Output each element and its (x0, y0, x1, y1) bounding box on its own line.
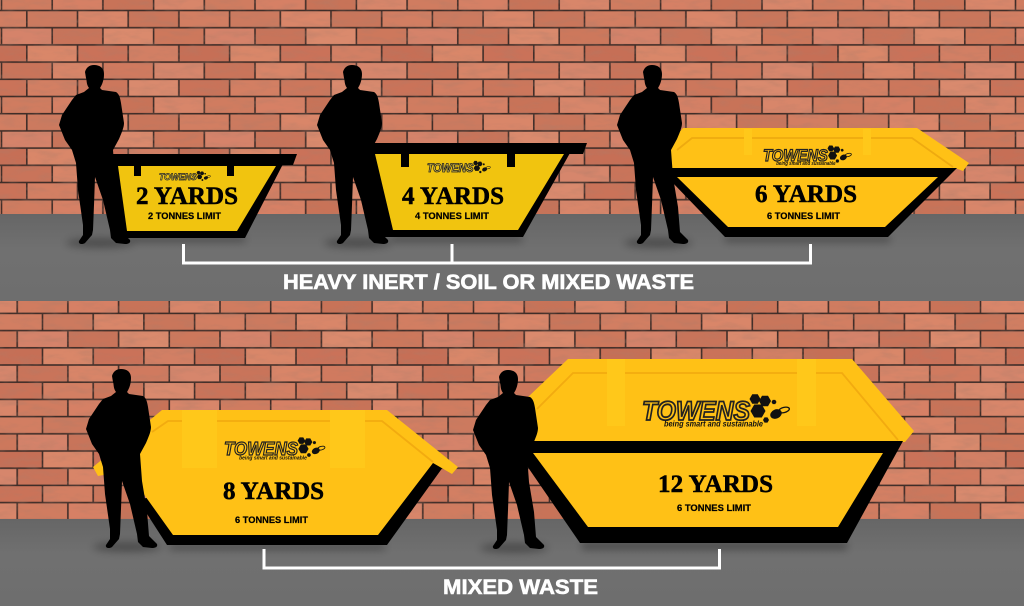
lid straps (744, 129, 871, 155)
skip body panel (533, 453, 883, 527)
logo: being smart and sustainable (239, 455, 308, 461)
logo: TOWENS (159, 172, 197, 183)
logo (763, 146, 852, 167)
skip lid (666, 128, 969, 171)
size label: 4 YARDS (402, 183, 504, 210)
brick wall: upper (0, 0, 1024, 214)
lid crease line (152, 421, 433, 462)
weight limit: 6 TONNES LIMIT (235, 515, 309, 525)
skip: 8 yards (93, 410, 458, 545)
weight limit: 4 TONNES LIMIT (415, 211, 490, 221)
skip body frame (108, 154, 283, 238)
skip body frame (138, 460, 443, 545)
weight limit: 6 TONNES LIMIT (767, 211, 841, 221)
brick wall: lower (0, 301, 1024, 519)
size label: 2 YARDS (136, 183, 238, 210)
skip rim (366, 143, 587, 154)
size label: 8 YARDS (223, 478, 324, 505)
lid straps (182, 410, 365, 468)
lid straps (607, 359, 816, 426)
size label: 12 YARDS (658, 471, 773, 498)
bracket: heavy inert group (184, 244, 810, 263)
silhouette: person beside 8 yard skip (86, 369, 157, 548)
skip body frame (366, 143, 570, 237)
skip body panel (375, 154, 564, 230)
skip body frame (520, 441, 903, 543)
brick texture: upper (0, 0, 1024, 214)
logo: TOWENS (427, 162, 474, 175)
brick texture: lower (0, 301, 1024, 519)
skip lid (520, 359, 914, 442)
skip yellow shell (93, 410, 458, 535)
skip rim (108, 154, 297, 165)
logo: TOWENS (642, 396, 750, 426)
lifting tabs (401, 153, 515, 167)
ground shadows (66, 236, 890, 553)
size label: 6 YARDS (755, 181, 857, 208)
background: upper ground (0, 214, 1024, 302)
skip: 2 yards (108, 154, 297, 238)
silhouette: person beside 4 yard skip (317, 65, 388, 244)
logo (224, 437, 325, 461)
logo: being smart and sustainable (664, 418, 763, 428)
logo: TOWENS (224, 438, 299, 459)
skip: 12 yards (520, 359, 914, 543)
lid crease line (677, 138, 953, 167)
heading: heavy inert / soil or mixed waste: HEAVY INERT / SOIL OR MIXED WASTE (283, 271, 694, 294)
weight limit: 2 TONNES LIMIT (148, 211, 222, 221)
lid crease line (537, 373, 898, 440)
background: lower ground (0, 519, 1024, 606)
skip: 4 yards (366, 143, 587, 237)
silhouette: person beside 12 yard skip (473, 370, 544, 549)
skip body frame (666, 168, 957, 237)
logo (642, 394, 790, 428)
logo: being smart and sustainable (776, 161, 836, 167)
heading: mixed waste: MIXED WASTE (443, 576, 598, 599)
lifting tabs (134, 165, 234, 176)
skip body panel (677, 177, 938, 227)
bracket: mixed waste group (264, 549, 720, 568)
silhouette: person beside 2 yard skip (59, 65, 130, 244)
silhouette: person beside 6 yard skip (617, 65, 688, 244)
logo: TOWENS (763, 147, 828, 165)
weight limit: 6 TONNES LIMIT (677, 503, 752, 513)
skip body panel (118, 166, 276, 231)
skip: 6 yards (666, 128, 969, 237)
